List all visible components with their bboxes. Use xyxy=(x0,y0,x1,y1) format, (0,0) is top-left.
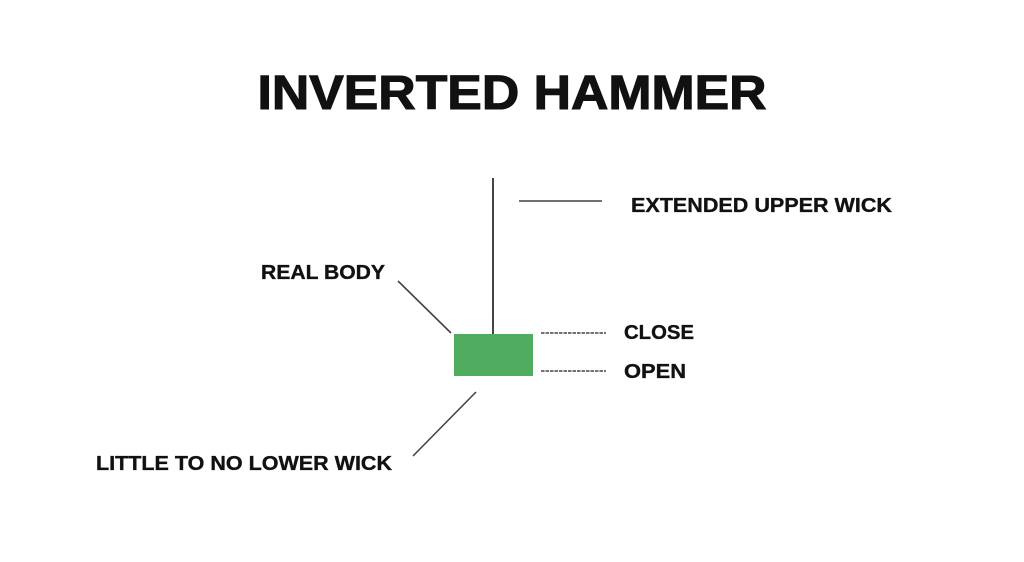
label: real body: REAL BODY xyxy=(261,262,386,284)
arrow: open dashed leader xyxy=(541,370,606,372)
label: close: CLOSE xyxy=(624,322,694,344)
arrow: real body leader xyxy=(398,281,451,333)
label: open: OPEN xyxy=(624,361,686,383)
arrow: lower wick leader xyxy=(413,392,476,456)
label: little to no lower wick: LITTLE TO NO LOWER WICK xyxy=(96,453,393,475)
arrow: close dashed leader xyxy=(541,332,606,334)
arrow: extended upper wick leader xyxy=(519,200,602,202)
candlestick xyxy=(454,178,533,376)
title: INVERTED HAMMER xyxy=(258,67,766,120)
real body xyxy=(454,334,533,376)
upper wick xyxy=(492,178,494,334)
label: extended upper wick: EXTENDED UPPER WICK xyxy=(631,195,893,217)
